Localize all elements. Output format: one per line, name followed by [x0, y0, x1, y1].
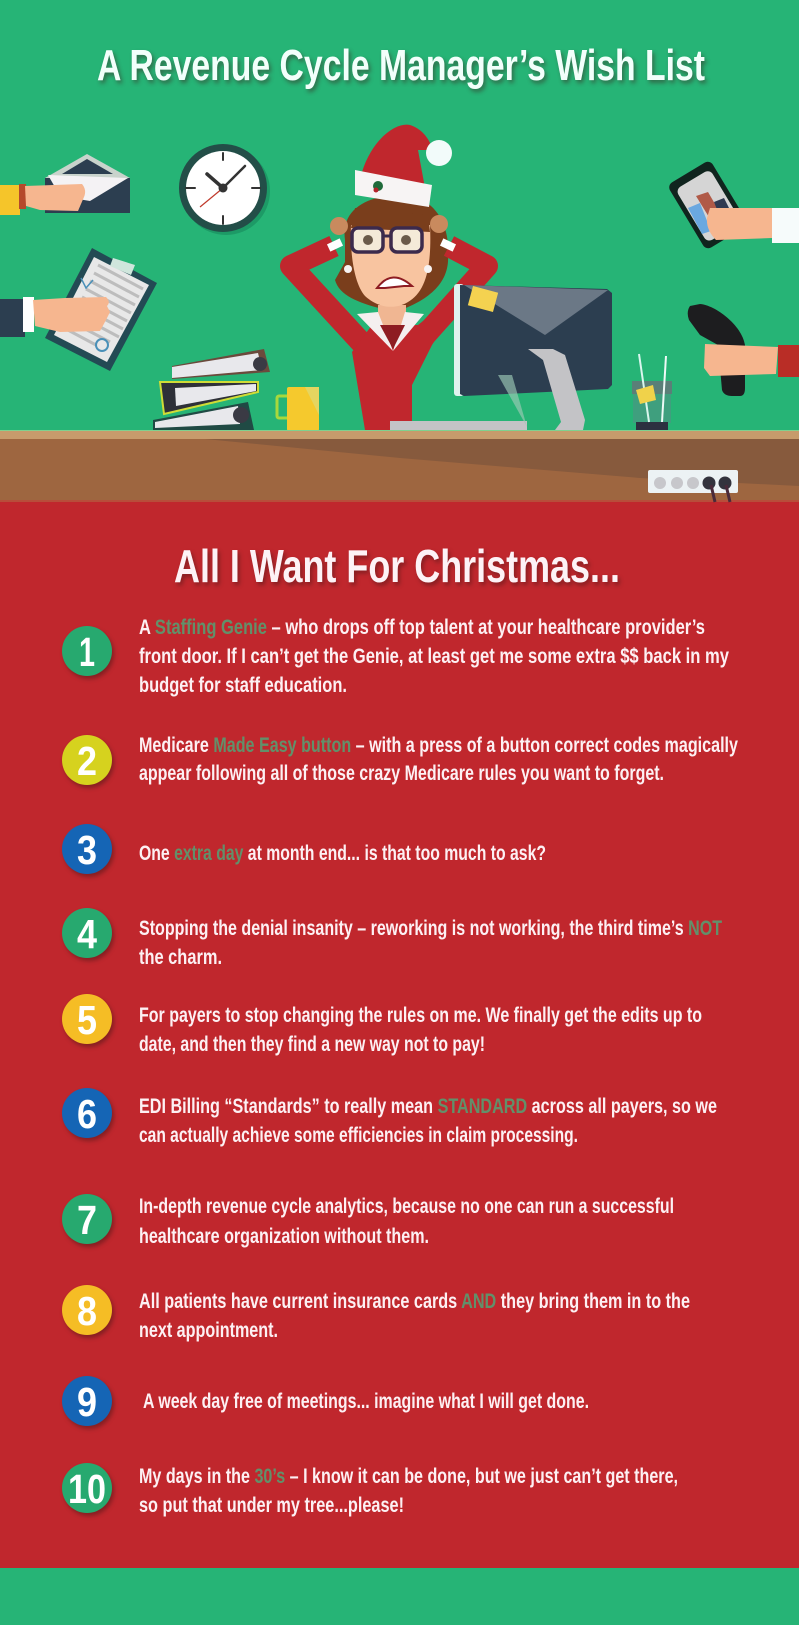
item 5 text [139, 1004, 702, 1056]
badge 5 [62, 994, 112, 1044]
badge 2 [62, 735, 112, 785]
green header background [0, 0, 799, 431]
item 7 [62, 1194, 674, 1248]
badge 1 [62, 626, 112, 676]
badge 1: 1 [79, 629, 95, 675]
item 2 text [139, 734, 738, 785]
item 9 [62, 1376, 589, 1426]
item 10 text: My days in the 30’s – I know it can be done, but we just can’t get there, [139, 1465, 678, 1488]
red list panel background [0, 502, 799, 1568]
badge 2: 2 [77, 738, 97, 784]
item 1 [62, 616, 729, 697]
badge 4: 4 [77, 911, 97, 957]
badge 6 [62, 1088, 112, 1138]
illustration: tablet with hand [667, 160, 799, 250]
illustration: clipboard with hand [0, 248, 157, 371]
green footer band [0, 1568, 799, 1625]
badge 8 [62, 1285, 112, 1335]
badge 8: 8 [77, 1288, 97, 1334]
badge 3 [62, 824, 112, 874]
item 8 text [139, 1290, 690, 1342]
item 10 text: so put that under my tree...please! [139, 1494, 404, 1517]
illustration: pen cup [632, 354, 672, 431]
badge 4 [62, 908, 112, 958]
badge 7: 7 [77, 1197, 97, 1243]
item 6 text [139, 1095, 717, 1147]
item 1 text: budget for staff education. [139, 674, 347, 697]
illustration: computer monitor and keyboard [390, 284, 612, 430]
illustration: phone handset with hand [688, 304, 799, 396]
item 10 text [139, 1465, 678, 1517]
badge 5: 5 [77, 997, 97, 1043]
badge 6: 6 [77, 1091, 97, 1137]
item 2 [62, 734, 738, 785]
item 10 [62, 1463, 678, 1517]
item 8 text: next appointment. [139, 1319, 278, 1342]
item 3 [62, 824, 546, 874]
badge 10: 10 [68, 1466, 106, 1512]
badge 9 [62, 1376, 112, 1426]
item 4 text: the charm. [139, 946, 222, 969]
item 1 text [139, 616, 729, 697]
item 5 text: date, and then they find a new way not to pay! [139, 1033, 485, 1056]
illustration: wall clock [179, 144, 270, 235]
illustration: mug [277, 387, 319, 431]
item 6 text: EDI Billing “Standards” to really mean STANDARD across all payers, so we [139, 1095, 717, 1118]
desk [0, 430, 799, 502]
badge 9: 9 [77, 1379, 97, 1425]
item 8 text: All patients have current insurance cards AND they bring them in to the [139, 1290, 690, 1313]
item 7 text: healthcare organization without them. [139, 1225, 429, 1248]
item 4 [62, 908, 722, 969]
illustration: woman with santa hat [291, 125, 487, 430]
item 8 [62, 1285, 690, 1342]
badge 3: 3 [77, 827, 97, 873]
item 4 text [139, 917, 722, 969]
power strip with plugs [648, 470, 738, 502]
item 9 text: A week day free of meetings... imagine what I will get done. [143, 1390, 589, 1413]
item 6 [62, 1088, 717, 1147]
item 5 [62, 994, 702, 1056]
illustration: envelope with hand [0, 154, 130, 215]
item 3 text: One extra day at month end... is that too much to ask? [139, 842, 546, 865]
item 6 text: can actually achieve some efficiencies in claim processing. [139, 1124, 578, 1147]
illustration: stacked binders [153, 349, 270, 430]
section heading: All I Want For Christmas... [174, 540, 620, 592]
badge 7 [62, 1194, 112, 1244]
item 7 text [139, 1195, 674, 1248]
